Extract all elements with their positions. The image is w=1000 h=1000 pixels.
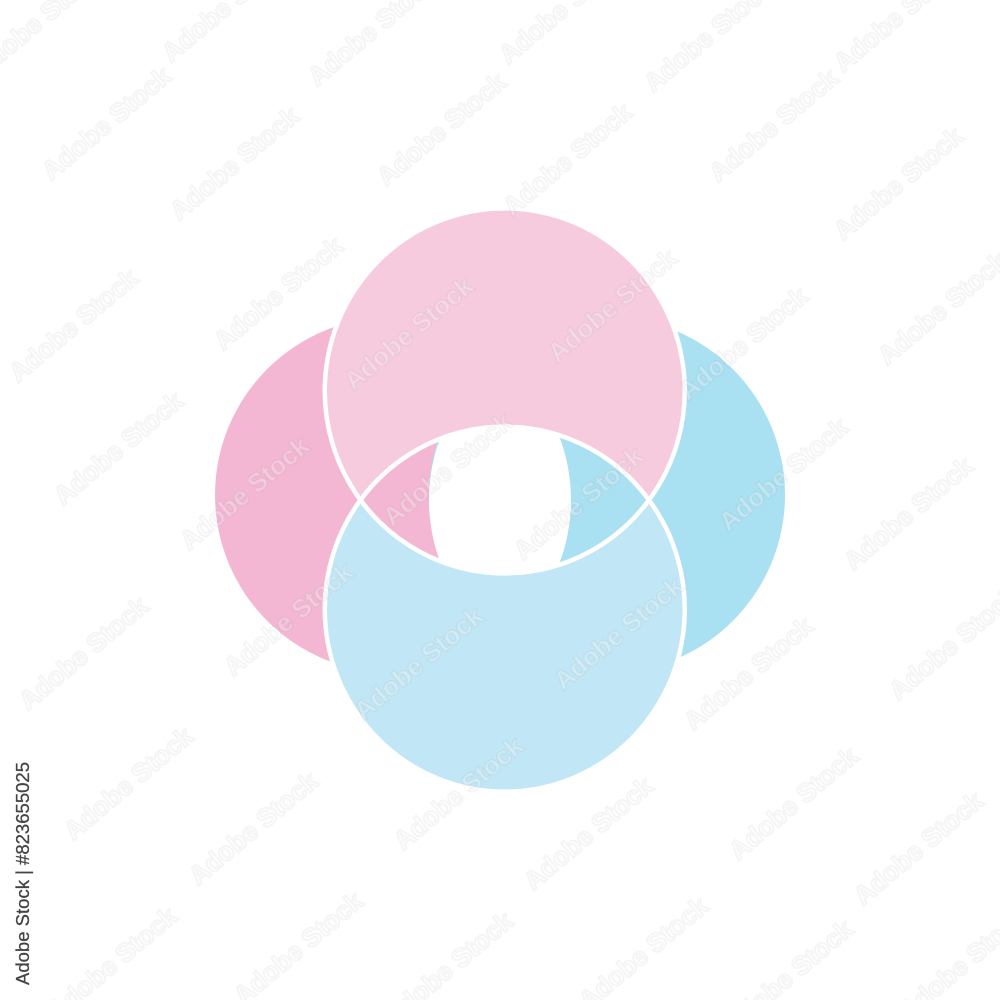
circle: left pink xyxy=(215,317,571,673)
circle: right blue xyxy=(429,317,785,673)
watermark pattern: Adobe Stock xyxy=(218,556,359,682)
watermark pattern: Adobe Stock xyxy=(208,230,349,356)
watermark pattern: Adobe Stock xyxy=(678,610,819,736)
watermark pattern: Adobe Stock xyxy=(377,406,518,532)
watermark pattern: Adobe Stock xyxy=(838,450,979,576)
watermark pattern: Adobe Stock xyxy=(518,770,659,896)
watermark pattern: Adobe Stock xyxy=(388,730,529,856)
watermark pattern: Adobe Stock xyxy=(548,570,689,696)
watermark pattern: Adobe Stock xyxy=(371,66,512,192)
watermark pattern: Adobe Stock xyxy=(348,600,489,726)
watermark pattern: Adobe Stock xyxy=(542,242,683,368)
watermark pattern: Adobe Stock xyxy=(673,280,814,406)
watermark pattern: Adobe Stock xyxy=(338,270,479,396)
watermark pattern: Adobe Stock xyxy=(3,262,144,388)
crescent: top pink xyxy=(325,208,685,500)
watermark pattern: Adobe Stock xyxy=(174,430,315,556)
watermark pattern: Adobe Stock xyxy=(36,60,177,186)
watermark pattern: Adobe Stock xyxy=(13,590,154,716)
watermark pattern: Adobe Stock xyxy=(48,385,189,511)
watermark pattern: Adobe Stock xyxy=(703,62,844,188)
watermark pattern: Adobe Stock xyxy=(183,765,324,891)
watermark pattern: Adobe Stock xyxy=(164,100,305,226)
watermark pattern: Adobe Stock xyxy=(828,120,969,246)
watermark pattern: Adobe Stock xyxy=(58,720,199,846)
watermark pattern: Adobe Stock xyxy=(713,411,854,537)
watermark pattern: Adobe Stock xyxy=(723,740,864,866)
centre white overlap of left and right circles xyxy=(429,428,571,572)
watermark pattern: Adobe Stock xyxy=(508,440,649,566)
stock credit text: Adobe Stock | #823655025 xyxy=(13,762,33,985)
watermark pattern: Adobe Stock xyxy=(848,785,989,911)
watermark pattern: Adobe Stock xyxy=(497,96,638,222)
crescent: bottom blue xyxy=(325,500,685,792)
